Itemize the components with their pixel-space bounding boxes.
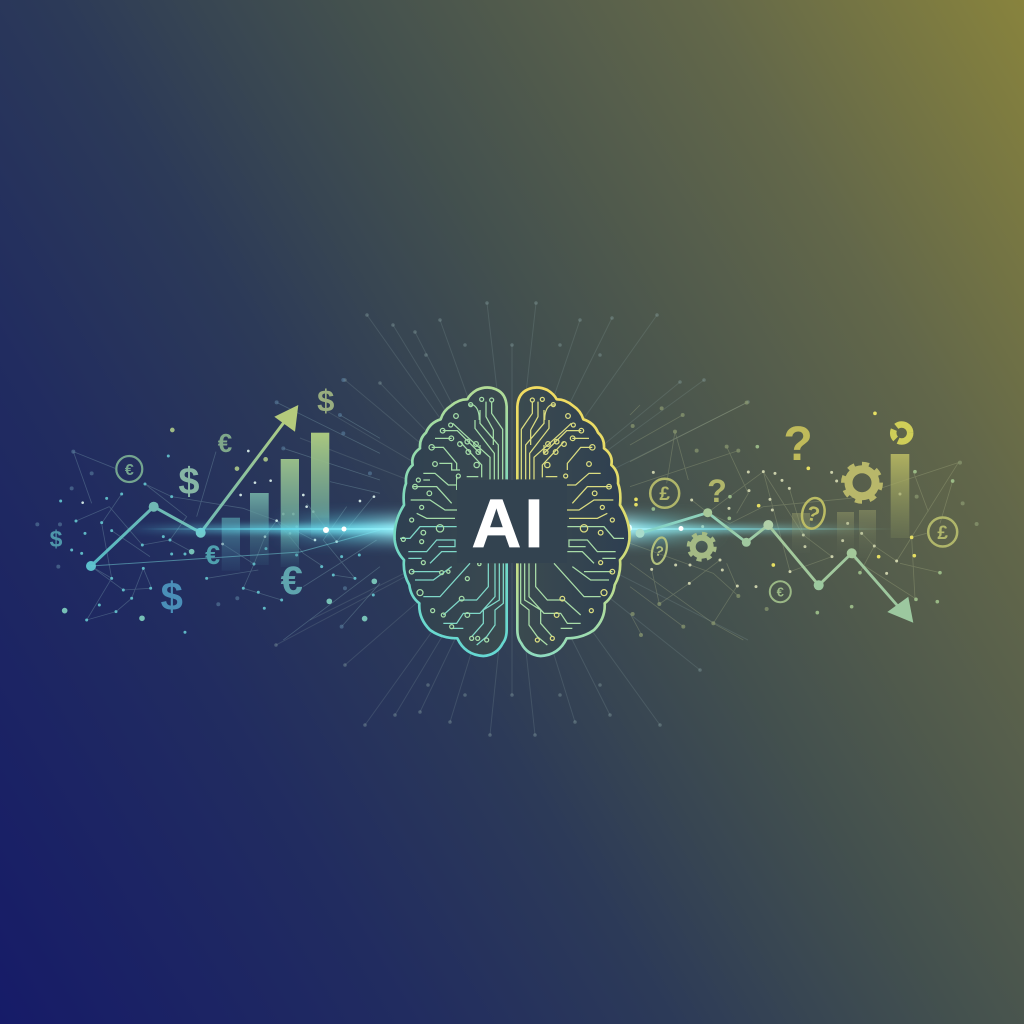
falling trend line with arrow [636,508,913,623]
right network bright dots [652,472,900,587]
left network teal dots [61,456,373,632]
right network links [630,403,958,640]
baseline link [91,530,380,566]
tilted coin small [649,536,669,565]
left network large dots [65,552,374,619]
right hemisphere [517,387,629,656]
left network lime dots [172,430,266,469]
large question mark: ? [783,418,813,471]
right network dim dots [633,403,977,635]
left currency symbols: € [281,559,303,603]
tilted coin large: ? [804,502,822,527]
pound coin right [928,518,957,546]
left bar chart [222,433,329,571]
left currency symbols: € [218,428,232,458]
left currency symbols: $ [50,526,63,552]
pound coin left: £ [659,484,670,505]
euro coin: € [777,584,784,600]
broken ring icon [893,424,910,442]
right network green dots [653,447,953,613]
left network links [73,402,380,640]
left rising chart [86,405,380,571]
left currency symbols: $ [161,575,183,619]
large gear icon [844,464,880,501]
small question mark: ? [707,473,727,509]
small gear icon [689,534,715,560]
right hemisphere circuit traces [521,397,624,645]
left currency symbols [50,383,334,619]
faded right bars [792,454,909,558]
light streak [120,517,895,541]
left network of dots and links [37,380,380,640]
rising trend line with arrow [86,405,298,571]
AI label: AI [472,485,546,562]
brain [395,387,629,656]
left hemisphere circuit traces [400,397,503,645]
right network of dots and links [630,403,977,640]
left hemisphere [395,387,507,656]
radiating rays around brain [276,303,748,735]
right uncertainty symbols [649,418,957,602]
tilted coin large [799,496,828,531]
dark panel behind AI label [457,480,567,563]
tilted coin small: ? [653,542,665,560]
right network yellow dots [636,413,914,565]
left currency symbols: $ [178,461,200,503]
pound coin right: £ [937,523,948,544]
left currency symbols: € [205,540,220,570]
left network dim dots [37,380,370,627]
pound coin left [650,479,679,508]
right falling chart [636,454,913,623]
euro coin [770,581,791,602]
left network bright dots [83,451,374,544]
left currency symbols: € [125,462,134,479]
left currency symbols: $ [317,383,334,418]
